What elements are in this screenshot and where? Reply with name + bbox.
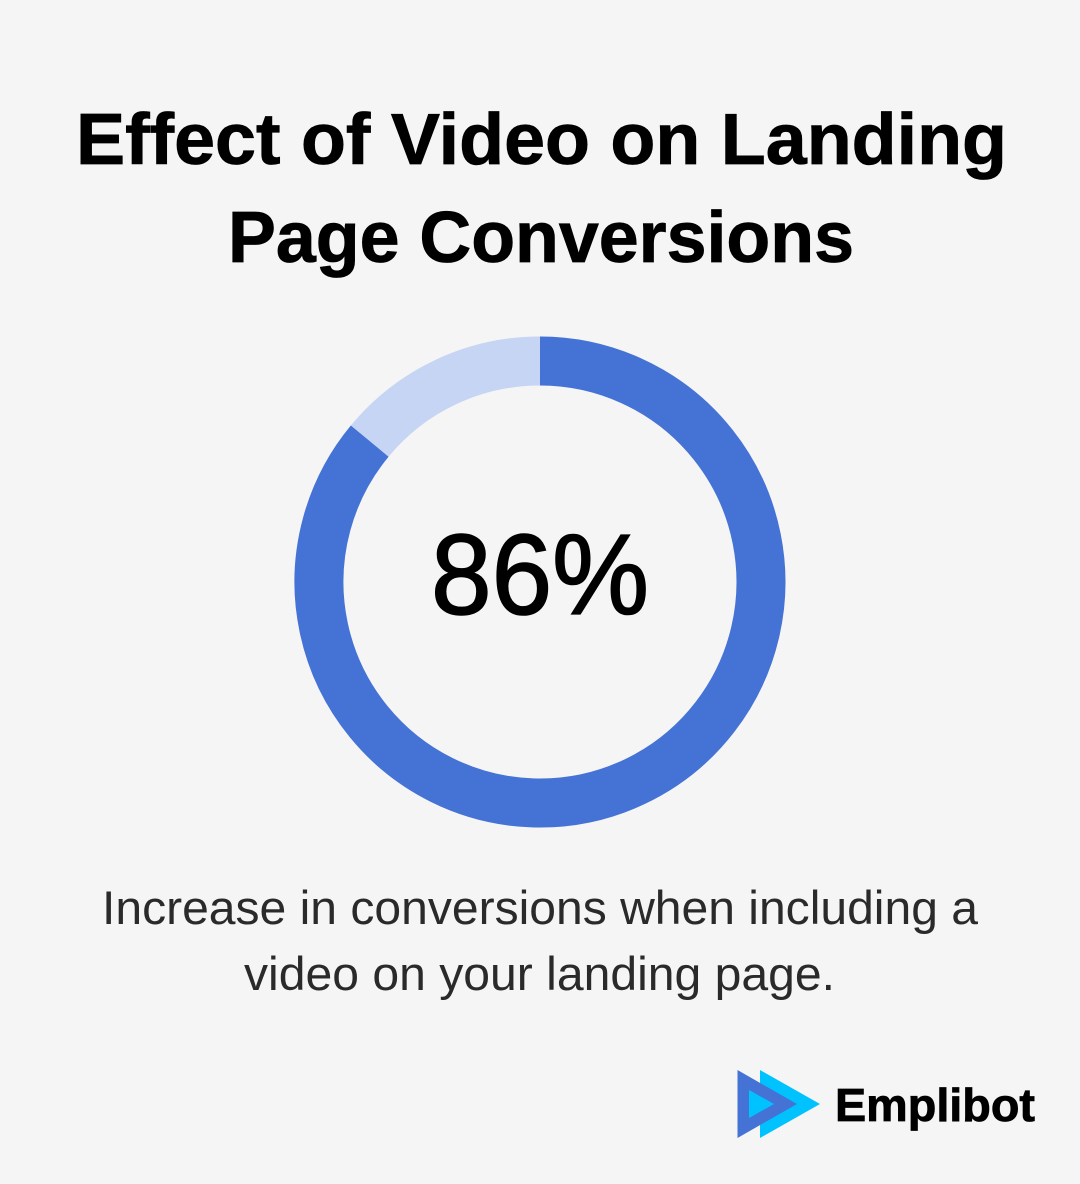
donut chart: 86% (319, 361, 761, 803)
description: video on your landing page. (244, 947, 835, 1000)
big number: 86% (431, 512, 649, 639)
donut track: remaining 14% (370, 361, 540, 441)
donut value arc: 86% (319, 361, 761, 803)
description (102, 881, 979, 1000)
icon: play triangles (738, 1070, 820, 1138)
wordmark: Emplibot (835, 1079, 1035, 1131)
title: Effect of Video on Landing (76, 100, 1007, 180)
logo: Emplibot (738, 1070, 1035, 1138)
description: Increase in conversions when including a (102, 881, 979, 934)
title (76, 100, 1007, 278)
title: Page Conversions (228, 198, 854, 278)
